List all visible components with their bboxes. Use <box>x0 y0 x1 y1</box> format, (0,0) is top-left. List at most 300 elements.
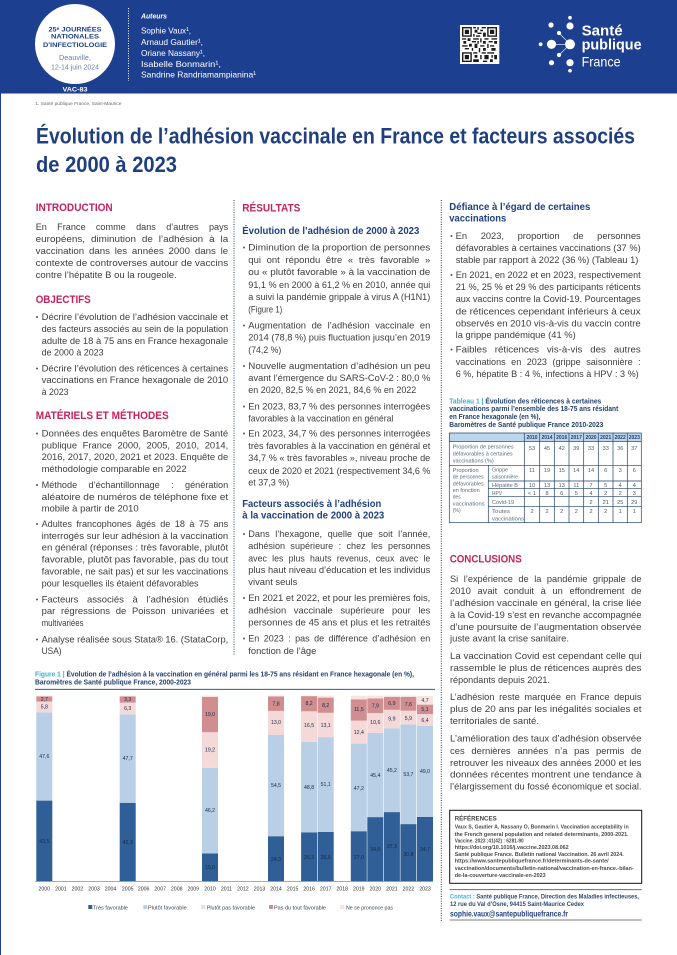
table values: 1 <box>633 509 636 515</box>
authors: Sandrine Randriamampianina¹ <box>141 70 256 80</box>
table header years <box>526 435 640 441</box>
bullet: diminution: a suivi la pandémie grippale à virus A (H1N1) <box>248 292 430 302</box>
bullet: 2023 très favorables: ceux de 2020 et 2021 (respectivement 34,6 % <box>248 466 430 476</box>
text block: introduction: contre l’hépatite B ou la rougeole. <box>36 270 177 280</box>
bullet: 2021 et 2022 <box>243 593 431 628</box>
text block: conclusion 3: plus de 20 ans par les inégalités sociales et <box>450 704 642 714</box>
table row labels: en fonction <box>453 488 480 494</box>
bar 2016: 48,8 <box>304 785 314 791</box>
bar 2023: 4,7 <box>421 698 429 704</box>
table row labels: Proportion <box>453 468 479 474</box>
bar 2022 <box>400 696 416 881</box>
bullet: Covid-19: 21 %, 25 % et 29 % des participants réticents <box>456 282 641 292</box>
text block: references: the French general population and related determinants, 2000-2021. <box>455 832 629 838</box>
bullet: données <box>36 428 228 474</box>
table header years: 2016 <box>556 435 567 441</box>
table row labels: Toutes <box>492 509 510 515</box>
bar 2014: 7,8 <box>272 702 280 708</box>
bullet: facteurs: Facteurs associés à l’adhésion étudiés <box>42 594 229 604</box>
bullet: 2023 favorables: favorables à la vaccination en général <box>248 414 393 424</box>
bullet: faibles réticences: 6 %, hépatite B : 4 %, infections à HPV : 3 %) <box>456 369 639 379</box>
table values: 6 <box>604 468 607 474</box>
table values: 19 <box>544 468 550 474</box>
text block: conclusion 1: Si l’expérience de la pandémie grippale de <box>450 574 642 584</box>
heading: références: RÉFÉRENCES <box>455 814 497 823</box>
text block: conclusion 3: L’adhésion reste marquée en France depuis <box>450 692 642 702</box>
bullet: diminution: Diminution de la proportion de personnes <box>248 242 431 252</box>
bullet: méthode: mobile à partir de 2010 <box>42 504 139 514</box>
stacked bar chart <box>35 696 433 893</box>
conference badge: Deauville, <box>59 55 91 62</box>
bullet: hexagone: adhésion supérieure : chez les personnes <box>248 541 431 551</box>
bar 2021: 6,9 <box>388 701 396 707</box>
text block: introduction: vaccination dans les années 2000 dans le <box>36 246 228 256</box>
table values: 8 <box>545 491 549 497</box>
legend: Plutôt favorable <box>148 905 187 911</box>
table values: 2 <box>545 509 549 515</box>
bar 2005 <box>120 696 136 881</box>
panel: conclusions <box>449 553 642 792</box>
table row labels: Grippe <box>492 468 508 474</box>
subheading: facteurs associés <box>242 498 384 522</box>
conference badge <box>35 4 115 84</box>
bullet: 2023 âge <box>243 634 430 656</box>
bullet: hexagone: avec les plus hauts revenus, ceux avec le <box>248 554 430 564</box>
table values: 14 <box>573 468 579 474</box>
x axis years: 2015 <box>287 887 298 893</box>
bar 2023: 5,1 <box>421 707 429 713</box>
table values: 42 <box>559 446 565 452</box>
bullet: objectif 1: des facteurs associés au sein de la population <box>42 324 228 334</box>
heading: introduction: INTRODUCTION <box>36 202 113 214</box>
bullet: 2023 âge: En 2023 : pas de différence d’adhésion en <box>248 634 430 644</box>
table values: 2 <box>604 509 607 515</box>
bullet: analyse: USA) <box>42 646 62 656</box>
logo: Santé publique France: Santé <box>582 22 623 40</box>
table values: 3 <box>619 468 622 474</box>
bullet: hexagone <box>243 529 431 587</box>
bar 2023: 34,7 <box>420 847 430 853</box>
contact: sophie.vaux@santepubliquefrance.fr <box>450 908 569 918</box>
table values: 29 <box>631 500 637 506</box>
bullet: diminution: qui ont répondu être « très favorable » <box>248 255 430 265</box>
bullet: hexagone: vivant seuls <box>248 577 298 587</box>
bullet: hexagone: plus haut niveau d’éducation et les individus <box>248 565 431 575</box>
bar 2022: 7,6 <box>405 702 412 708</box>
x axis years: 2023 <box>419 887 431 893</box>
text block: conclusion 4: ces dernières années n’a pas permis de <box>450 746 642 756</box>
heading: matériels et méthodes: MATÉRIELS ET MÉTHODES <box>36 409 169 422</box>
text block: conclusion 4: retrouver les niveaux des années 2000 et les <box>450 758 642 768</box>
table row labels: Hépatite B <box>492 483 518 489</box>
bar 2017: 13,1 <box>321 723 331 729</box>
table values: 1 <box>619 509 622 515</box>
bar 2020 <box>367 696 383 881</box>
bar 2000: 47,6 <box>39 754 49 760</box>
table values: 10 <box>529 483 535 489</box>
table values: 2 <box>530 509 534 515</box>
x axis years: 2007 <box>154 887 166 893</box>
bullet: objectif 2: à 2023 <box>42 387 69 397</box>
bullet: facteurs: par régressions de Poisson univariées et <box>42 606 229 616</box>
bullet: 2023 âge: fonction de l’âge <box>248 646 316 656</box>
bullet: 2023 favorables: En 2023, 83,7 % des personnes interrogées <box>248 402 431 412</box>
bar 2014 <box>268 696 284 881</box>
title: de 2000 à 2023 <box>36 152 177 177</box>
bullet: Covid-19: de réticences cependant inférieurs à ceux <box>456 306 641 316</box>
panel: défiance <box>449 201 641 379</box>
bullet: faibles réticences <box>450 344 641 379</box>
table values: 37 <box>631 446 637 452</box>
bullet: augmentation 2014 <box>243 320 430 355</box>
bar 2000: 5,8 <box>41 704 48 710</box>
table values: 36 <box>617 446 623 452</box>
bullet: méthode <box>36 480 229 514</box>
table values: 11 <box>529 468 535 474</box>
figure caption: Baromètres de Santé publique France, 2000-2023 <box>35 680 191 687</box>
bar 2020: 7,9 <box>372 704 379 710</box>
bar 2019 <box>351 696 367 881</box>
text block: references: https://doi.org/10.1016/j.vaccine.2023.08.062 <box>455 845 569 851</box>
table values: 2 <box>619 491 622 497</box>
figure caption <box>35 670 414 687</box>
x axis years: 2022 <box>403 887 414 893</box>
text block: conclusion 1 <box>449 574 642 644</box>
table values: 2 <box>589 500 593 506</box>
bar 2000 <box>36 696 52 881</box>
header band <box>0 0 677 94</box>
bar 2020: 45,4 <box>370 773 380 779</box>
table values: 2 <box>575 509 578 515</box>
table values: 39 <box>573 446 579 452</box>
bar 2005: 42,3 <box>123 840 133 846</box>
x axis years: 2017 <box>320 887 332 893</box>
x axis years: 2018 <box>336 887 348 893</box>
bullet: facteurs <box>36 594 229 628</box>
table values: 11 <box>573 483 579 489</box>
bullet: proportion 2023: défavorables à certaines vaccinations (37 %) <box>456 243 641 253</box>
table header years: 2014 <box>541 435 553 441</box>
bar 2005: 6,3 <box>124 706 131 712</box>
bar 2000: 43,5 <box>39 839 49 845</box>
bullet: méthode: Méthode d’échantillonnage : génération <box>42 480 228 490</box>
legend <box>88 905 393 911</box>
logo: Santé publique France: publique <box>582 36 642 54</box>
bullet: adultes: favorable, plutôt pas favorable, pas du tout <box>42 554 229 564</box>
table values: 6 <box>560 491 563 497</box>
bullet: augmentation 2014: (74,2 %) <box>248 345 281 355</box>
bar 2021: 37,3 <box>387 844 397 850</box>
bullet: objectif 2 <box>36 364 229 397</box>
table 1 <box>449 433 641 523</box>
panel: matériels et méthodes <box>36 409 229 656</box>
text block: references: Vaux S, Gautier A, Nassany O, Bonmarin I. Vaccination acceptability in <box>455 824 629 830</box>
panel: objectifs <box>36 294 229 397</box>
bullet: hexagone: Dans l’hexagone, quelle que soit l’année, <box>248 529 430 539</box>
text block: conclusion 2: rassemble le plus de réticences auprès des <box>450 663 642 673</box>
heading: conclusions: CONCLUSIONS <box>450 553 522 565</box>
text block: conclusion 4 <box>450 734 642 792</box>
table values: 33 <box>588 446 594 452</box>
text block: introduction: contexte de controverses autour de vaccins <box>36 258 229 268</box>
bullet: proportion 2023: stable par rapport à 2022 (36 %) (Tableau 1) <box>456 255 638 265</box>
bar 2016: 16,5 <box>304 723 314 729</box>
bar 2005: 3,3 <box>124 697 131 703</box>
bullet: faibles réticences: vaccinations en 2023 (grippe saisonnière : <box>456 357 641 367</box>
panel: références <box>450 810 642 883</box>
bar 2020: 34,6 <box>370 847 380 853</box>
table values: 45 <box>544 446 550 452</box>
table values: 2 <box>589 509 593 515</box>
x axis years <box>39 887 431 893</box>
bullet: données: méthodologie comparable en 2022 <box>42 464 187 474</box>
bar 2021: 9,9 <box>388 716 396 722</box>
authors: Oriane Nassany¹, <box>141 48 205 58</box>
bar 2019: 11,5 <box>354 707 364 713</box>
table caption: Baromètres de Santé publique France 2010-2023 <box>449 420 603 429</box>
bar 2014: 54,5 <box>271 783 281 789</box>
text block: conclusion 2 <box>450 651 642 685</box>
text block: conclusion 1: à la Covid-19 s’est en revanche accompagnée <box>450 610 642 620</box>
bullet: 2023 très favorables: et 37,3 %) <box>248 478 289 488</box>
text block: conclusion 2: La vaccination Covid est cependant celle qui <box>450 651 642 661</box>
bullet: adultes: pour lesquelles ils étaient défavorables <box>42 578 199 588</box>
table values: 13 <box>544 483 550 489</box>
bullet: faibles réticences: Faibles réticences vis-à-vis des autres <box>456 344 641 354</box>
bullet: Covid-19: aux vaccins contre la Covid-19. Pourcentages <box>456 294 641 304</box>
heading: objectifs: OBJECTIFS <box>36 294 91 306</box>
table values: 21 <box>603 500 609 506</box>
panel: résultats <box>242 202 431 656</box>
figure caption: Figure 1 | Évolution de l’adhésion à la vaccination en général parmi les 18-75 ans résidant en France hexagonale (en %), <box>35 670 414 679</box>
x axis years: 2019 <box>353 887 365 893</box>
table row labels: saisonnière <box>492 474 518 480</box>
text block: introduction: En France comme dans d’autres pays <box>36 222 229 232</box>
bullet: diminution: ou « plutôt favorable » à la vaccination de <box>248 267 430 277</box>
table row labels: défavorables <box>453 481 484 487</box>
bullet: 2023 très favorables: 34,7 % « très favorables », niveau proche de <box>248 453 430 463</box>
subheading: défiance: Défiance à l’égard de certaines <box>449 201 590 213</box>
bullet: nouvelle augmentation: Nouvelle augmentation d’adhésion un peu <box>248 361 430 371</box>
logo: Santé publique France <box>539 16 642 72</box>
table values: 4 <box>619 483 622 489</box>
bar 2016: 26,3 <box>304 855 314 861</box>
subheading: défiance: vaccinations <box>449 213 506 225</box>
x axis years: 2012 <box>237 887 249 893</box>
text block: conclusion 4: l’élargissement du fossé économique et social. <box>450 782 642 792</box>
table values: 2 <box>604 491 607 497</box>
bullet: diminution: (Figure 1) <box>248 304 282 314</box>
bullet: analyse: Analyse réalisée sous Stata® 16. (StataCorp, <box>42 634 228 644</box>
table row labels: vaccinations <box>453 501 485 507</box>
table values: 33 <box>603 446 609 452</box>
text block: conclusion 4: données récentes montrent une tendance à <box>450 770 642 780</box>
x axis years: 2014 <box>270 887 282 893</box>
legend: Très favorable <box>93 905 128 911</box>
table values: 15 <box>559 468 565 474</box>
heading: résultats: RÉSULTATS <box>242 202 300 215</box>
x axis years: 2020 <box>370 887 381 893</box>
table header years: 2022 <box>615 435 626 441</box>
bullet: méthode: aléatoire de numéros de téléphone fixe et <box>42 492 229 502</box>
bar 2022: 5,9 <box>405 716 412 722</box>
bar 2016: 8,2 <box>305 701 313 707</box>
bar 2019: 12,4 <box>354 730 364 736</box>
bar 2017 <box>318 696 334 881</box>
conference badge: 12-14 juin 2024 <box>51 64 99 72</box>
authors: Sophie Vaux¹, <box>141 26 191 36</box>
bullet: 2023 très favorables <box>243 428 431 488</box>
bullet: Covid-19: la grippe pandémique (41 %) <box>456 330 576 340</box>
table header years: 2020 <box>585 435 597 441</box>
bullet: adultes: Adultes francophones âgés de 18 à 75 ans <box>42 519 229 529</box>
contact: 12 rue du Val d’Osne, 94415 Saint-Maurice Cedex <box>450 901 584 908</box>
bullet: 2023 très favorables: très favorables à la vaccination en général et <box>248 441 431 451</box>
table values: 14 <box>588 468 594 474</box>
text block: references: Santé publique France. Bulletin national Vaccination. 26 avril 2024. <box>455 852 624 858</box>
bullet: adultes: en général (réponses : très favorable, plutôt <box>42 542 229 552</box>
bullet: 2021 et 2022: adhésion vaccinale supérieure pour les <box>248 606 431 616</box>
text block: references: de-la-couverture-vaccinale-en-2023 <box>455 873 546 879</box>
bullet: objectif 1: de 2000 à 2023 <box>42 348 104 358</box>
conference badge: NATIONALES <box>51 34 100 41</box>
bullet: diminution: 91,1 % en 2000 à 61,2 % en 2010, année qui <box>248 280 430 290</box>
logo: Santé publique France: France <box>582 53 621 69</box>
poster code: VAC-83 <box>62 86 88 94</box>
table values: 3 <box>633 491 636 497</box>
x axis years: 2011 <box>221 887 232 893</box>
table header years: 2017 <box>571 435 582 441</box>
bullet: 2021 et 2022: En 2021 et 2022, et pour les premières fois, <box>248 593 430 603</box>
table header years: 2021 <box>600 435 611 441</box>
subheading: défiance <box>449 201 590 225</box>
bar 2000: 2,7 <box>41 697 48 703</box>
bullet: nouvelle augmentation <box>243 361 430 395</box>
bullet: Covid-19: observés en 2010 vis-à-vis du vaccin contre <box>456 318 641 328</box>
bar 2010 <box>202 696 218 881</box>
legend: Pas du tout favorable <box>274 905 326 911</box>
bar 2023 <box>417 696 433 881</box>
x axis years: 2004 <box>105 887 116 893</box>
contact <box>450 890 642 920</box>
text block: conclusion 3 <box>450 692 642 726</box>
table values: 2 <box>560 509 563 515</box>
table values: 5 <box>575 491 578 497</box>
bullet: objectif 1: Décrire l’évolution de l’adhésion vaccinale et <box>42 312 229 322</box>
bar 2017: 8,2 <box>322 703 329 709</box>
text block: references: vaccination/documents/bulletin-national/vaccination-en-france.-bilan- <box>455 866 634 872</box>
bar 2014: 24,3 <box>271 857 281 863</box>
bar 2022: 53,7 <box>403 772 414 778</box>
bar 2017: 51,1 <box>321 782 331 788</box>
bullet: objectif 1: adulte de 18 à 75 ans en France hexagonale <box>42 336 228 346</box>
text block: conclusion 4: L’amélioration des taux d’adhésion observée <box>450 734 642 744</box>
bullet: nouvelle augmentation: en 2020, 82,5 % en 2021, 84,6 % en 2022 <box>248 385 416 395</box>
table values: 4 <box>589 491 593 497</box>
bar 2005: 47,7 <box>123 756 133 762</box>
table values: < 1 <box>528 491 536 497</box>
authors: Arnaud Gautier¹, <box>141 37 203 47</box>
bar 2021 <box>384 696 400 881</box>
bar 2020: 10,6 <box>370 720 380 726</box>
text block: references: https://www.santepubliquefrance.fr/determinants-de-sante/ <box>455 858 609 864</box>
bullet: objectif 2: Décrire l’évolution des réticences à certaines <box>42 364 229 374</box>
bullet: diminution <box>243 242 431 314</box>
bar 2010: 15,0 <box>205 865 215 871</box>
bar 2023: 6,4 <box>421 718 429 724</box>
table header years: 2010 <box>526 435 538 441</box>
bullet: données: Données des enquêtes Baromètre de Santé <box>42 428 228 438</box>
bullet: adultes: interrogés sur leur adhésion à la vaccination <box>42 531 228 541</box>
table values <box>528 446 637 515</box>
table caption <box>449 396 619 429</box>
bullet: objectif 2: vaccinations en France hexagonale de 2010 <box>42 375 228 385</box>
table values: 13 <box>559 483 565 489</box>
subheading: facteurs associés: Facteurs associés à l’adhésion <box>242 498 381 510</box>
x axis years: 2002 <box>72 887 83 893</box>
bullet: 2023 très favorables: En 2023, 34,7 % des personnes interrogées <box>248 428 431 438</box>
bullet: augmentation 2014: Augmentation de l’adhésion vaccinale en <box>248 320 430 330</box>
bar 2010: 19,0 <box>205 712 215 718</box>
x axis years: 2010 <box>204 887 216 893</box>
x axis years: 2000 <box>39 887 50 893</box>
table row labels: de personnes <box>453 475 484 481</box>
text block: introduction <box>36 222 229 280</box>
x axis years: 2001 <box>55 887 67 893</box>
table caption: en France hexagonale (en %), <box>449 412 540 421</box>
authors: Auteurs <box>140 14 167 20</box>
text block: conclusion 1: 2010 avait conduit à un effondrement de <box>450 586 642 596</box>
conference badge: 25ᵉ JOURNÉES <box>48 24 102 34</box>
bullet: 2021 et 2022: personnes de 45 ans et plus et les retraités <box>248 618 431 628</box>
text block: conclusion 1: juste avant la crise sanitaire. <box>449 634 569 644</box>
table values: 7 <box>589 483 593 489</box>
table row labels: vaccinations <box>492 516 524 522</box>
bullet: analyse <box>36 634 228 656</box>
legend: Plutôt pas favorable <box>207 905 255 911</box>
text block: references <box>455 824 634 879</box>
x axis years: 2016 <box>303 887 315 893</box>
bar 2010: 19,2 <box>205 748 215 754</box>
bullet: objectif 1 <box>36 312 229 358</box>
x axis years: 2008 <box>171 887 183 893</box>
contact: Contact : Santé publique France, Direction des Maladies infectieuses, <box>450 894 639 901</box>
table row labels: Proportion de personnes <box>453 445 514 451</box>
bar 2016 <box>301 696 317 881</box>
subheading: évolution: Évolution de l’adhésion de 2000 à 2023 <box>242 224 419 237</box>
text block: conclusion 3: territoriales de santé. <box>450 716 539 726</box>
x axis years: 2006 <box>138 887 149 893</box>
text block: conclusion 1: l’adhésion vaccinale en général, la crise liée <box>450 598 642 608</box>
panel: introduction <box>36 202 229 280</box>
table row labels <box>453 445 524 522</box>
bullet: augmentation 2014: 2014 (78,8 %) puis fluctuation jusqu’en 2019 <box>248 332 430 342</box>
table values: 53 <box>529 446 535 452</box>
x axis years: 2021 <box>386 887 398 893</box>
subheading: facteurs associés: à la vaccination de 2000 à 2023 <box>242 510 384 522</box>
bar 2019: 47,2 <box>354 786 364 792</box>
text block: introduction: européens, diminution de l’adhésion à la <box>36 234 229 244</box>
bullet: données: 2016, 2017, 2020, 2021 et 2023. Enquête de <box>42 452 228 462</box>
text block: conclusion 1: d’une poursuite de l’augmentation observée <box>450 622 642 632</box>
x axis years: 2013 <box>254 887 265 893</box>
bullet: Covid-19: En 2021, en 2022 et en 2023, respectivement <box>456 270 641 280</box>
table values: 5 <box>604 483 607 489</box>
table row labels: (%) <box>453 508 461 514</box>
table values: 4 <box>633 483 636 489</box>
bullet: facteurs: multivariées <box>42 618 84 628</box>
table values: 25 <box>617 500 623 506</box>
